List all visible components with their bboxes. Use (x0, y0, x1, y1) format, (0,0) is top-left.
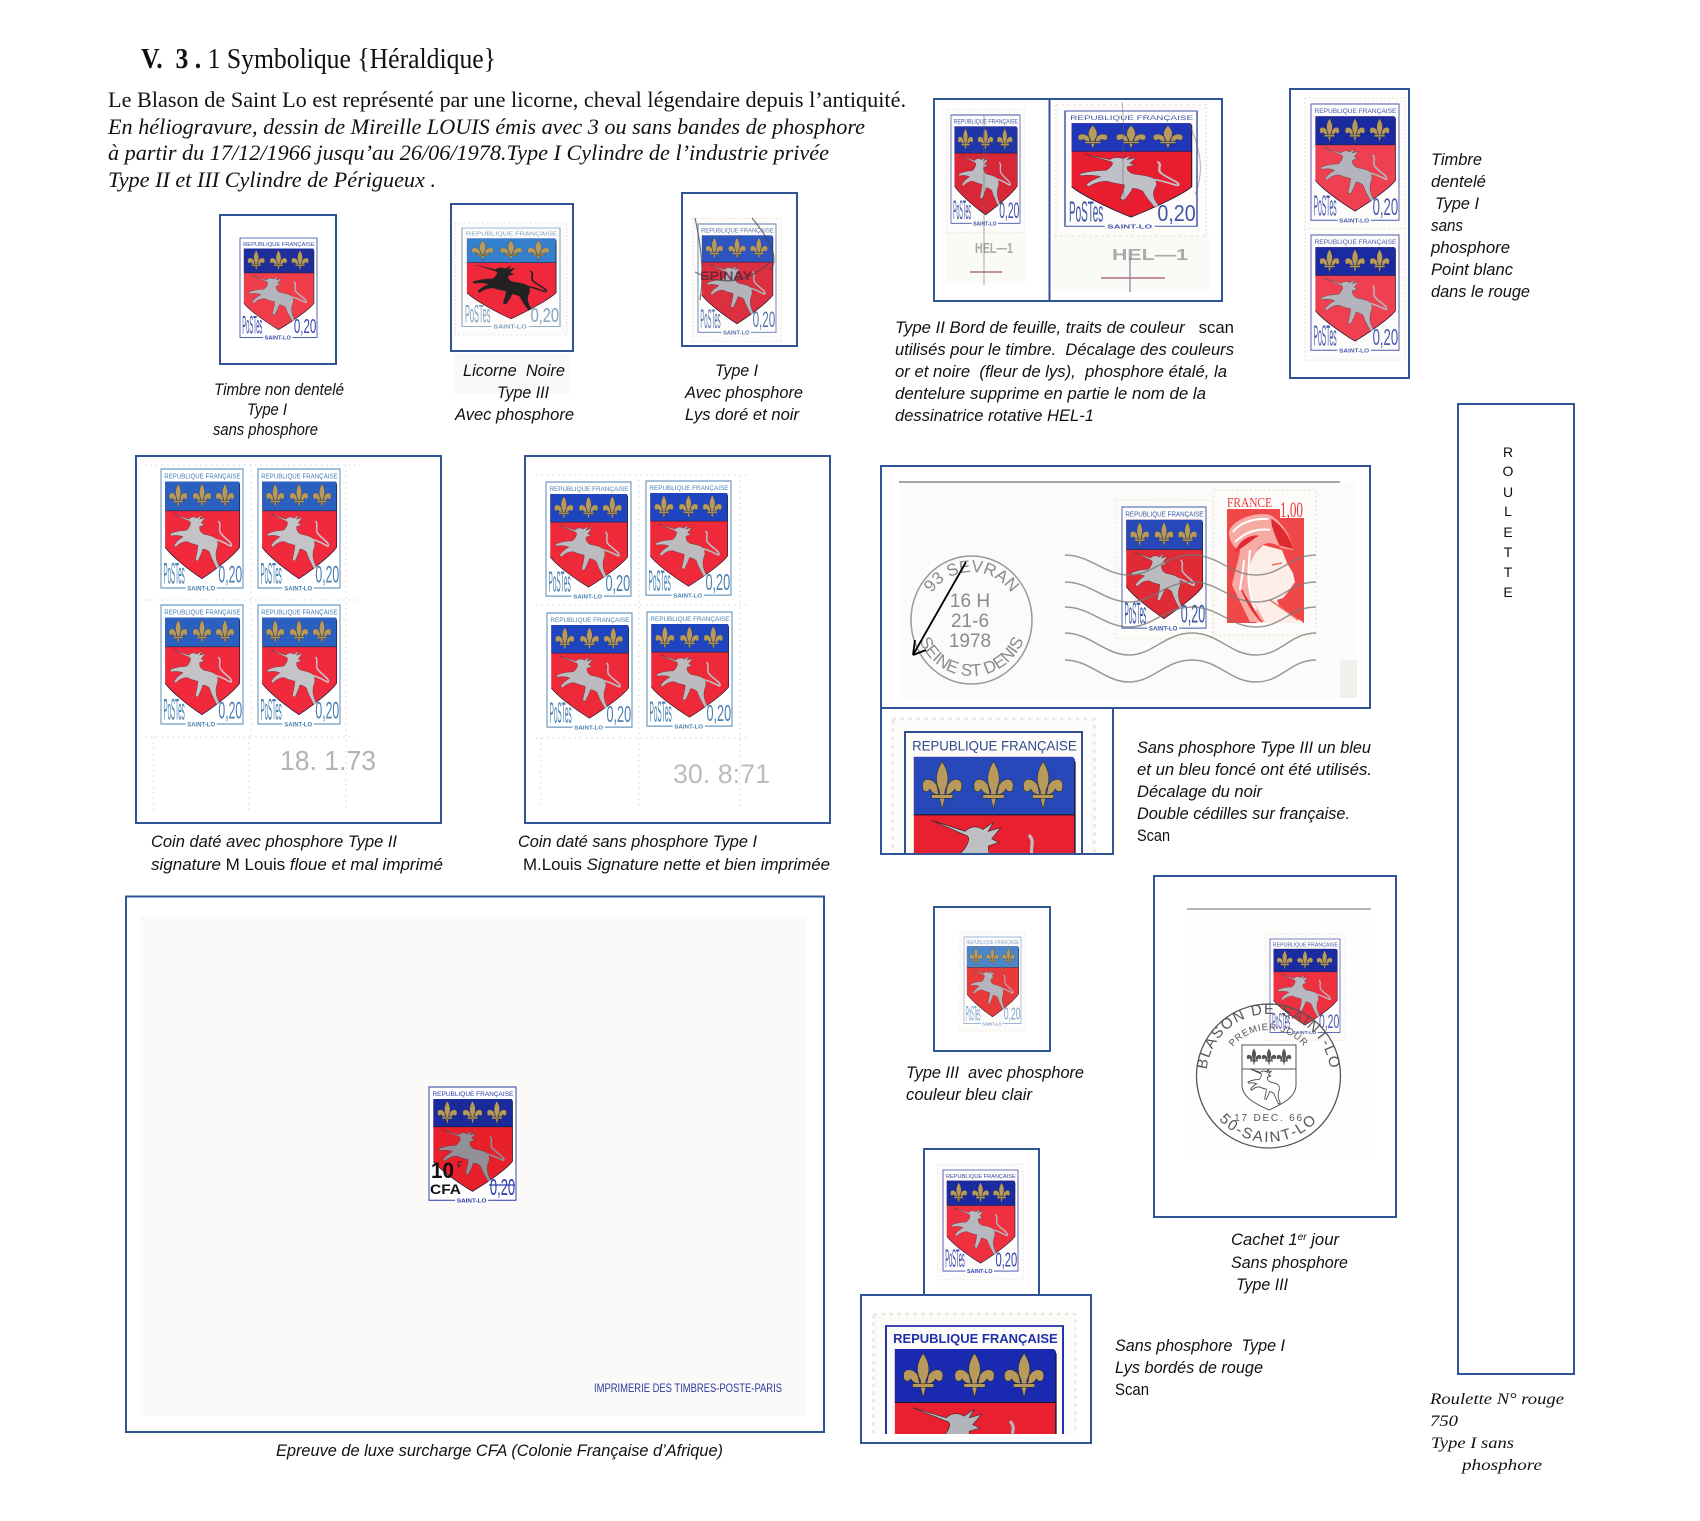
caption: Timbre (1431, 151, 1482, 169)
caption: phosphore (1461, 1457, 1542, 1474)
caption: Roulette N° rouge (1429, 1391, 1564, 1408)
panel: roulette (1429, 404, 1574, 1474)
stamp: light blue: REPUBLIQUE FRANÇAISE (966, 939, 1019, 945)
intro text: En héliogravure, dessin de Mireille LOUIS émis avec 3 ou sans bandes de phosphore (107, 114, 865, 139)
intro text: à partir du 17/12/1966 jusqu’au 26/06/1978.Type I Cylindre de l’industrie privée (108, 140, 829, 165)
stamp: row 1 col 2 (646, 481, 731, 599)
stamp: cancelled gold and black lilies: SAINT-LO (723, 330, 749, 336)
stamp: small with margin (945, 109, 1025, 285)
caption: Type III (497, 384, 549, 402)
stamp: row 1 col 1: PoSTes (549, 566, 571, 598)
caption (213, 381, 344, 439)
panel: crop type III double cédilles (880, 709, 1371, 855)
stamp: row 1 col 1: 0,20 (218, 560, 242, 588)
stamp: upper: PoSTes (1314, 190, 1337, 223)
postmark: first day: 50-SAINT-LO (1220, 1113, 1314, 1142)
postmark: first day (1196, 1003, 1342, 1149)
caption: Type I (715, 362, 758, 380)
stamp: first day (1265, 934, 1345, 1040)
stamp: row 2 col 1: 0,20 (218, 696, 242, 724)
postmark: first day: 17 DEC. 66 (1234, 1113, 1304, 1124)
frame (220, 215, 336, 364)
caption: Sans phosphore Type I (1115, 1337, 1285, 1355)
stamp: dark blue: PoSTes (945, 1246, 965, 1273)
stamp: imperforate (240, 238, 317, 341)
stamp: proof with CFA overprint: F (457, 1160, 463, 1170)
stamp: lower (1305, 229, 1405, 360)
stamp: enlarged with margin (1053, 102, 1209, 292)
caption (518, 833, 830, 874)
stamp: row 2 col 2: 0,20 (315, 696, 339, 724)
stamp: row 1 col 2: PoSTes (260, 557, 282, 590)
vertical label: E (1503, 584, 1513, 600)
stamp: proof with CFA overprint: SAINT-LO (457, 1198, 487, 1205)
stamp: row 1 col 1: REPUBLIQUE FRANÇAISE (549, 486, 629, 493)
stamp: row 1 col 2: SAINT-LO (673, 593, 703, 599)
panel: timbre non dentelé (213, 215, 344, 439)
caption: Timbre non dentelé (214, 381, 344, 399)
frame (451, 204, 573, 351)
caption: signature M Louis floue et mal imprimé (151, 856, 443, 874)
intro text: Type II et III Cylindre de Périgueux . (108, 167, 436, 192)
intro text: Le Blason de Saint Lo est représenté par une licorne, cheval légendaire depuis l’antiquité. (108, 87, 906, 112)
stamp: Sabine red 1,00: 1,00 (1280, 497, 1303, 522)
caption: Cachet 1 (1231, 1231, 1297, 1249)
stamp: dark blue: REPUBLIQUE FRANÇAISE (946, 1174, 1016, 1180)
caption: phosphore (1430, 239, 1510, 257)
caption: jour (1307, 1231, 1341, 1249)
envelope paper (1187, 909, 1371, 1159)
vertical label: O (1503, 463, 1514, 479)
intro text (107, 87, 906, 192)
frame left (934, 99, 1050, 301)
stamp: row 2 col 1 (161, 605, 243, 728)
caption: Coin daté sans phosphore Type I (518, 833, 757, 851)
vertical label: T (1504, 564, 1513, 580)
panel: coin daté sans phosphore (518, 456, 830, 874)
stamp: dark blue: 0,20 (996, 1249, 1017, 1272)
postmark: EPINAY (700, 269, 752, 283)
stamp: light blue: PoSTes (966, 1002, 981, 1026)
stamp: row 2 col 1: 0,20 (607, 700, 631, 727)
postmark: Sevran: 21-6 (951, 611, 989, 632)
postmark: first day: BLASON DE SAINT-LO (1196, 1004, 1340, 1068)
stamp: upper: REPUBLIQUE FRANÇAISE (1315, 108, 1397, 115)
frame: whole stamp (924, 1149, 1039, 1295)
stamp: enlarged crop (872, 1313, 1077, 1434)
stamp: lower: SAINT-LO (1339, 348, 1370, 354)
caption: Lys doré et noir (685, 406, 801, 424)
vertical label: T (1504, 544, 1513, 560)
stamp: cancelled gold and black lilies (693, 218, 781, 342)
caption: Type III avec phosphore (906, 1064, 1084, 1082)
printed date: 18. 1.73 (280, 745, 376, 776)
stamp: enlarged with margin: REPUBLIQUE FRANÇAISE (1070, 114, 1193, 122)
stamp: small with margin: PoSTes (953, 196, 971, 226)
caption: Avec phosphore (684, 384, 803, 402)
stamp: proof with CFA overprint: 0,20 (490, 1174, 515, 1200)
frame (126, 896, 824, 1432)
stamp: row 2 col 1: SAINT-LO (574, 725, 604, 731)
caption (151, 833, 443, 874)
stamp: row 1 col 1: 0,20 (606, 569, 630, 596)
stamp: dark blue (938, 1164, 1023, 1280)
stamp: row 2 col 2 (258, 605, 340, 728)
caption: Point blanc (1431, 261, 1514, 279)
caption: M.Louis Signature nette et bien imprimée (523, 856, 830, 874)
stamp: imperforate: PoSTes (242, 312, 262, 340)
stamp: row 2 col 2: REPUBLIQUE FRANÇAISE (261, 609, 338, 616)
stamp: row 1 col 2: REPUBLIQUE FRANÇAISE (649, 485, 729, 492)
caption: dans le rouge (1431, 283, 1530, 301)
stamp: imperforate: 0,20 (294, 316, 316, 338)
stamp: row 2 col 1: PoSTes (550, 697, 572, 729)
stamp: Saint-Lô (1116, 500, 1212, 638)
wavy cancellation lines (1065, 555, 1316, 682)
frame (881, 708, 1113, 854)
stamp: row 1 col 1: SAINT-LO (187, 586, 216, 592)
printed date: 30. 8:71 (673, 759, 770, 789)
frame (682, 193, 797, 346)
caption (895, 319, 1234, 425)
caption: 750 (1430, 1413, 1458, 1430)
frame (1290, 89, 1409, 378)
frame (881, 466, 1370, 708)
caption: utilisés pour le timbre. Décalage des couleurs (895, 341, 1234, 359)
stamp: small with margin: HEL—1 (975, 240, 1013, 257)
stamp: row 1 col 2 (258, 469, 340, 592)
stamp: black unicorn: SAINT-LO (493, 325, 527, 330)
stamp: first day: SAINT-LO (1292, 1030, 1317, 1035)
sheet perforation guides (145, 465, 360, 810)
caption: et un bleu foncé ont été utilisés. (1137, 761, 1372, 779)
stamp: imperforate: REPUBLIQUE FRANÇAISE (243, 242, 315, 248)
stamp: row 1 col 1 (161, 469, 243, 592)
stamp: black unicorn: PoSTes (465, 300, 490, 328)
postmark: Sevran: SEINE ST DENIS (920, 637, 1022, 676)
stamp: upper: 0,20 (1373, 193, 1398, 220)
postmark: first day: PREMIER JOUR (1228, 1024, 1308, 1046)
stamp: black unicorn (455, 223, 567, 335)
stamp: enlarged crop: REPUBLIQUE FRANÇAISE (912, 738, 1077, 753)
caption: dentelure supprime en partie le nom de la (895, 385, 1206, 403)
stamp: row 2 col 2 (647, 612, 732, 730)
caption: Type I sans (1431, 1435, 1514, 1452)
caption: Type I (247, 401, 287, 419)
frame (1458, 404, 1574, 1374)
caption (1231, 1231, 1348, 1294)
caption (1429, 1391, 1564, 1474)
stamp: row 2 col 2: SAINT-LO (284, 722, 313, 728)
vertical label: E (1503, 524, 1513, 540)
stamp: row 1 col 1: SAINT-LO (573, 594, 603, 600)
panel: épreuve de luxe (126, 896, 824, 1460)
caption: Scan (1137, 827, 1170, 845)
stamp: proof with CFA overprint (429, 1087, 516, 1205)
panel: type I lys doré et noir (682, 193, 803, 424)
stamp: row 1 col 2: 0,20 (706, 568, 730, 595)
caption: Epreuve de luxe surcharge CFA (Colonie Française d’Afrique) (276, 1442, 723, 1460)
stamp: Sabine red 1,00 (1214, 490, 1316, 635)
postmark: Sevran: 1978 (949, 631, 991, 652)
stamp: Saint-Lô: SAINT-LO (1149, 626, 1178, 633)
stamp: row 1 col 2: SAINT-LO (284, 586, 313, 592)
stamp: light blue (960, 932, 1025, 1031)
frame: enlarged crop (861, 1295, 1091, 1443)
postmark: Sevran: 93 SEVRAN (924, 560, 1020, 592)
stamp: row 2 col 2: SAINT-LO (674, 724, 704, 730)
stamp: small with margin: REPUBLIQUE FRANÇAISE (954, 119, 1018, 126)
stamp: cancelled gold and black lilies: 0,20 (753, 308, 775, 332)
caption (1137, 739, 1372, 845)
caption: Double cédilles sur française. (1137, 805, 1350, 823)
caption: Type III (1236, 1276, 1288, 1294)
panel: timbre dentelé pair (1290, 89, 1530, 378)
stamp: first day: REPUBLIQUE FRANÇAISE (1273, 942, 1338, 948)
stamp: lower: REPUBLIQUE FRANÇAISE (1315, 239, 1397, 246)
stamp: row 1 col 1 (546, 482, 631, 600)
stamp: light blue: 0,20 (1004, 1004, 1020, 1024)
stamp: upper (1305, 98, 1405, 230)
stamp: row 1 col 2: PoSTes (649, 565, 671, 597)
stamp: row 2 col 1: SAINT-LO (187, 722, 216, 728)
stamp: row 2 col 2: PoSTes (650, 696, 672, 728)
stamp: small with margin: SAINT-LO (973, 221, 997, 228)
proof paper (140, 916, 807, 1416)
caption: sans phosphore (213, 421, 318, 439)
caption (454, 353, 574, 424)
panel: type II bord de feuille (895, 99, 1234, 425)
vertical label: U (1503, 484, 1513, 500)
panel: enveloppe Sevran (880, 465, 1371, 709)
stamp: row 2 col 2: 0,20 (707, 699, 731, 726)
stamp: row 1 col 2: 0,20 (315, 560, 339, 588)
stamp: lower: 0,20 (1373, 324, 1398, 350)
stamp: row 1 col 1: REPUBLIQUE FRANÇAISE (164, 473, 241, 480)
vertical label (1503, 444, 1514, 600)
panel: licorne noire (451, 204, 574, 424)
stamp: dark blue: SAINT-LO (967, 1269, 993, 1275)
frame (1154, 876, 1396, 1217)
caption: Avec phosphore (454, 406, 574, 424)
stamp: proof with CFA overprint: 10 (431, 1158, 454, 1183)
panel: type III bleu clair (906, 907, 1084, 1104)
postmark: Sevran: 16 H (950, 591, 990, 612)
caption (906, 1064, 1084, 1104)
stamp: Saint-Lô: PoSTes (1125, 597, 1146, 631)
stamp: proof with CFA overprint: CFA (430, 1181, 461, 1197)
caption (1430, 151, 1530, 301)
vertical label: L (1504, 503, 1512, 519)
arrow: date pointer (913, 562, 966, 655)
stamp: first day: 0,20 (1319, 1011, 1339, 1032)
stamp: cancelled gold and black lilies: REPUBLIQUE FRANÇAISE (701, 227, 774, 235)
vertical label: R (1503, 444, 1513, 460)
stamp: enlarged crop (891, 718, 1096, 853)
stamp: lower: PoSTes (1314, 320, 1337, 353)
stamp: row 2 col 2: REPUBLIQUE FRANÇAISE (650, 616, 730, 623)
stamp: row 1 col 1: PoSTes (163, 557, 185, 590)
caption: or et noire (fleur de lys), phosphore étalé, la (895, 363, 1227, 381)
stamp: Saint-Lô: 0,20 (1181, 600, 1205, 628)
caption: Type I (1435, 195, 1479, 213)
caption: Licorne Noire (463, 362, 565, 380)
stamp: black unicorn: 0,20 (531, 304, 559, 326)
caption: Sans phosphore (1231, 1254, 1348, 1272)
stamp: row 2 col 1: REPUBLIQUE FRANÇAISE (550, 617, 630, 624)
stamp: enlarged with margin: HEL—1 (1112, 247, 1188, 264)
caption: dentelé (1431, 173, 1486, 191)
frame (525, 456, 830, 823)
postmark: Sevran (910, 555, 1033, 685)
stamp: proof with CFA overprint: REPUBLIQUE FRANÇAISE (432, 1091, 514, 1098)
stamp: row 2 col 2: PoSTes (260, 693, 282, 726)
stamp: black unicorn: REPUBLIQUE FRANÇAISE (466, 231, 558, 237)
caption: dessinatrice rotative HEL-1 (895, 407, 1094, 425)
stamp: cancelled gold and black lilies: PoSTes (700, 303, 721, 334)
caption: couleur bleu clair (906, 1086, 1034, 1104)
stamp: enlarged with margin: PoSTes (1069, 195, 1103, 228)
frame (934, 907, 1050, 1051)
stamp: enlarged crop: REPUBLIQUE FRANÇAISE (893, 1331, 1058, 1346)
envelope paper (899, 482, 1357, 698)
caption: Coin daté avec phosphore Type II (151, 833, 397, 851)
panel: type I sans phosphore lys bordés (861, 1149, 1285, 1521)
caption: Sans phosphore Type III un bleu (1137, 739, 1371, 757)
stamp: enlarged with margin: SAINT-LO (1107, 223, 1153, 230)
frame (136, 456, 441, 823)
title: V. 3 . 1 Symbolique {Héraldique} (141, 44, 496, 75)
stamp: Sabine red 1,00: FRANCE (1227, 496, 1272, 511)
caption (1115, 1337, 1285, 1399)
caption: Type II Bord de feuille, traits de couleur scan (895, 319, 1234, 337)
caption (684, 362, 803, 424)
postmark (695, 218, 774, 300)
stamp: Saint-Lô: REPUBLIQUE FRANÇAISE (1125, 511, 1204, 519)
frame right (1050, 99, 1222, 301)
stamp: imperforate: SAINT-LO (265, 335, 291, 341)
stamp: row 1 col 2: REPUBLIQUE FRANÇAISE (261, 473, 338, 480)
caption: sans (1431, 217, 1463, 235)
stamp: first day: PoSTes (1272, 1007, 1290, 1034)
panel: cachet 1er jour (1153, 875, 1397, 1294)
stamp: upper: SAINT-LO (1339, 218, 1370, 225)
stamp: row 2 col 1: REPUBLIQUE FRANÇAISE (164, 609, 241, 616)
stamp: light blue: SAINT-LO (982, 1021, 1002, 1026)
caption: Scan (1115, 1381, 1149, 1399)
printer imprint: IMPRIMERIE DES TIMBRES-POSTE-PARIS (594, 1383, 782, 1395)
caption: er (1298, 1232, 1307, 1243)
caption: Lys bordés de rouge (1115, 1359, 1263, 1377)
stamp: small with margin: 0,20 (999, 200, 1019, 224)
sheet perforation guides (536, 475, 750, 808)
stamp: row 2 col 1: PoSTes (163, 693, 185, 726)
stamp: enlarged with margin: 0,20 (1157, 200, 1196, 226)
panel: coin daté avec phosphore (136, 456, 443, 874)
caption: Décalage du noir (1137, 783, 1264, 801)
stamp: row 2 col 1 (547, 613, 632, 731)
